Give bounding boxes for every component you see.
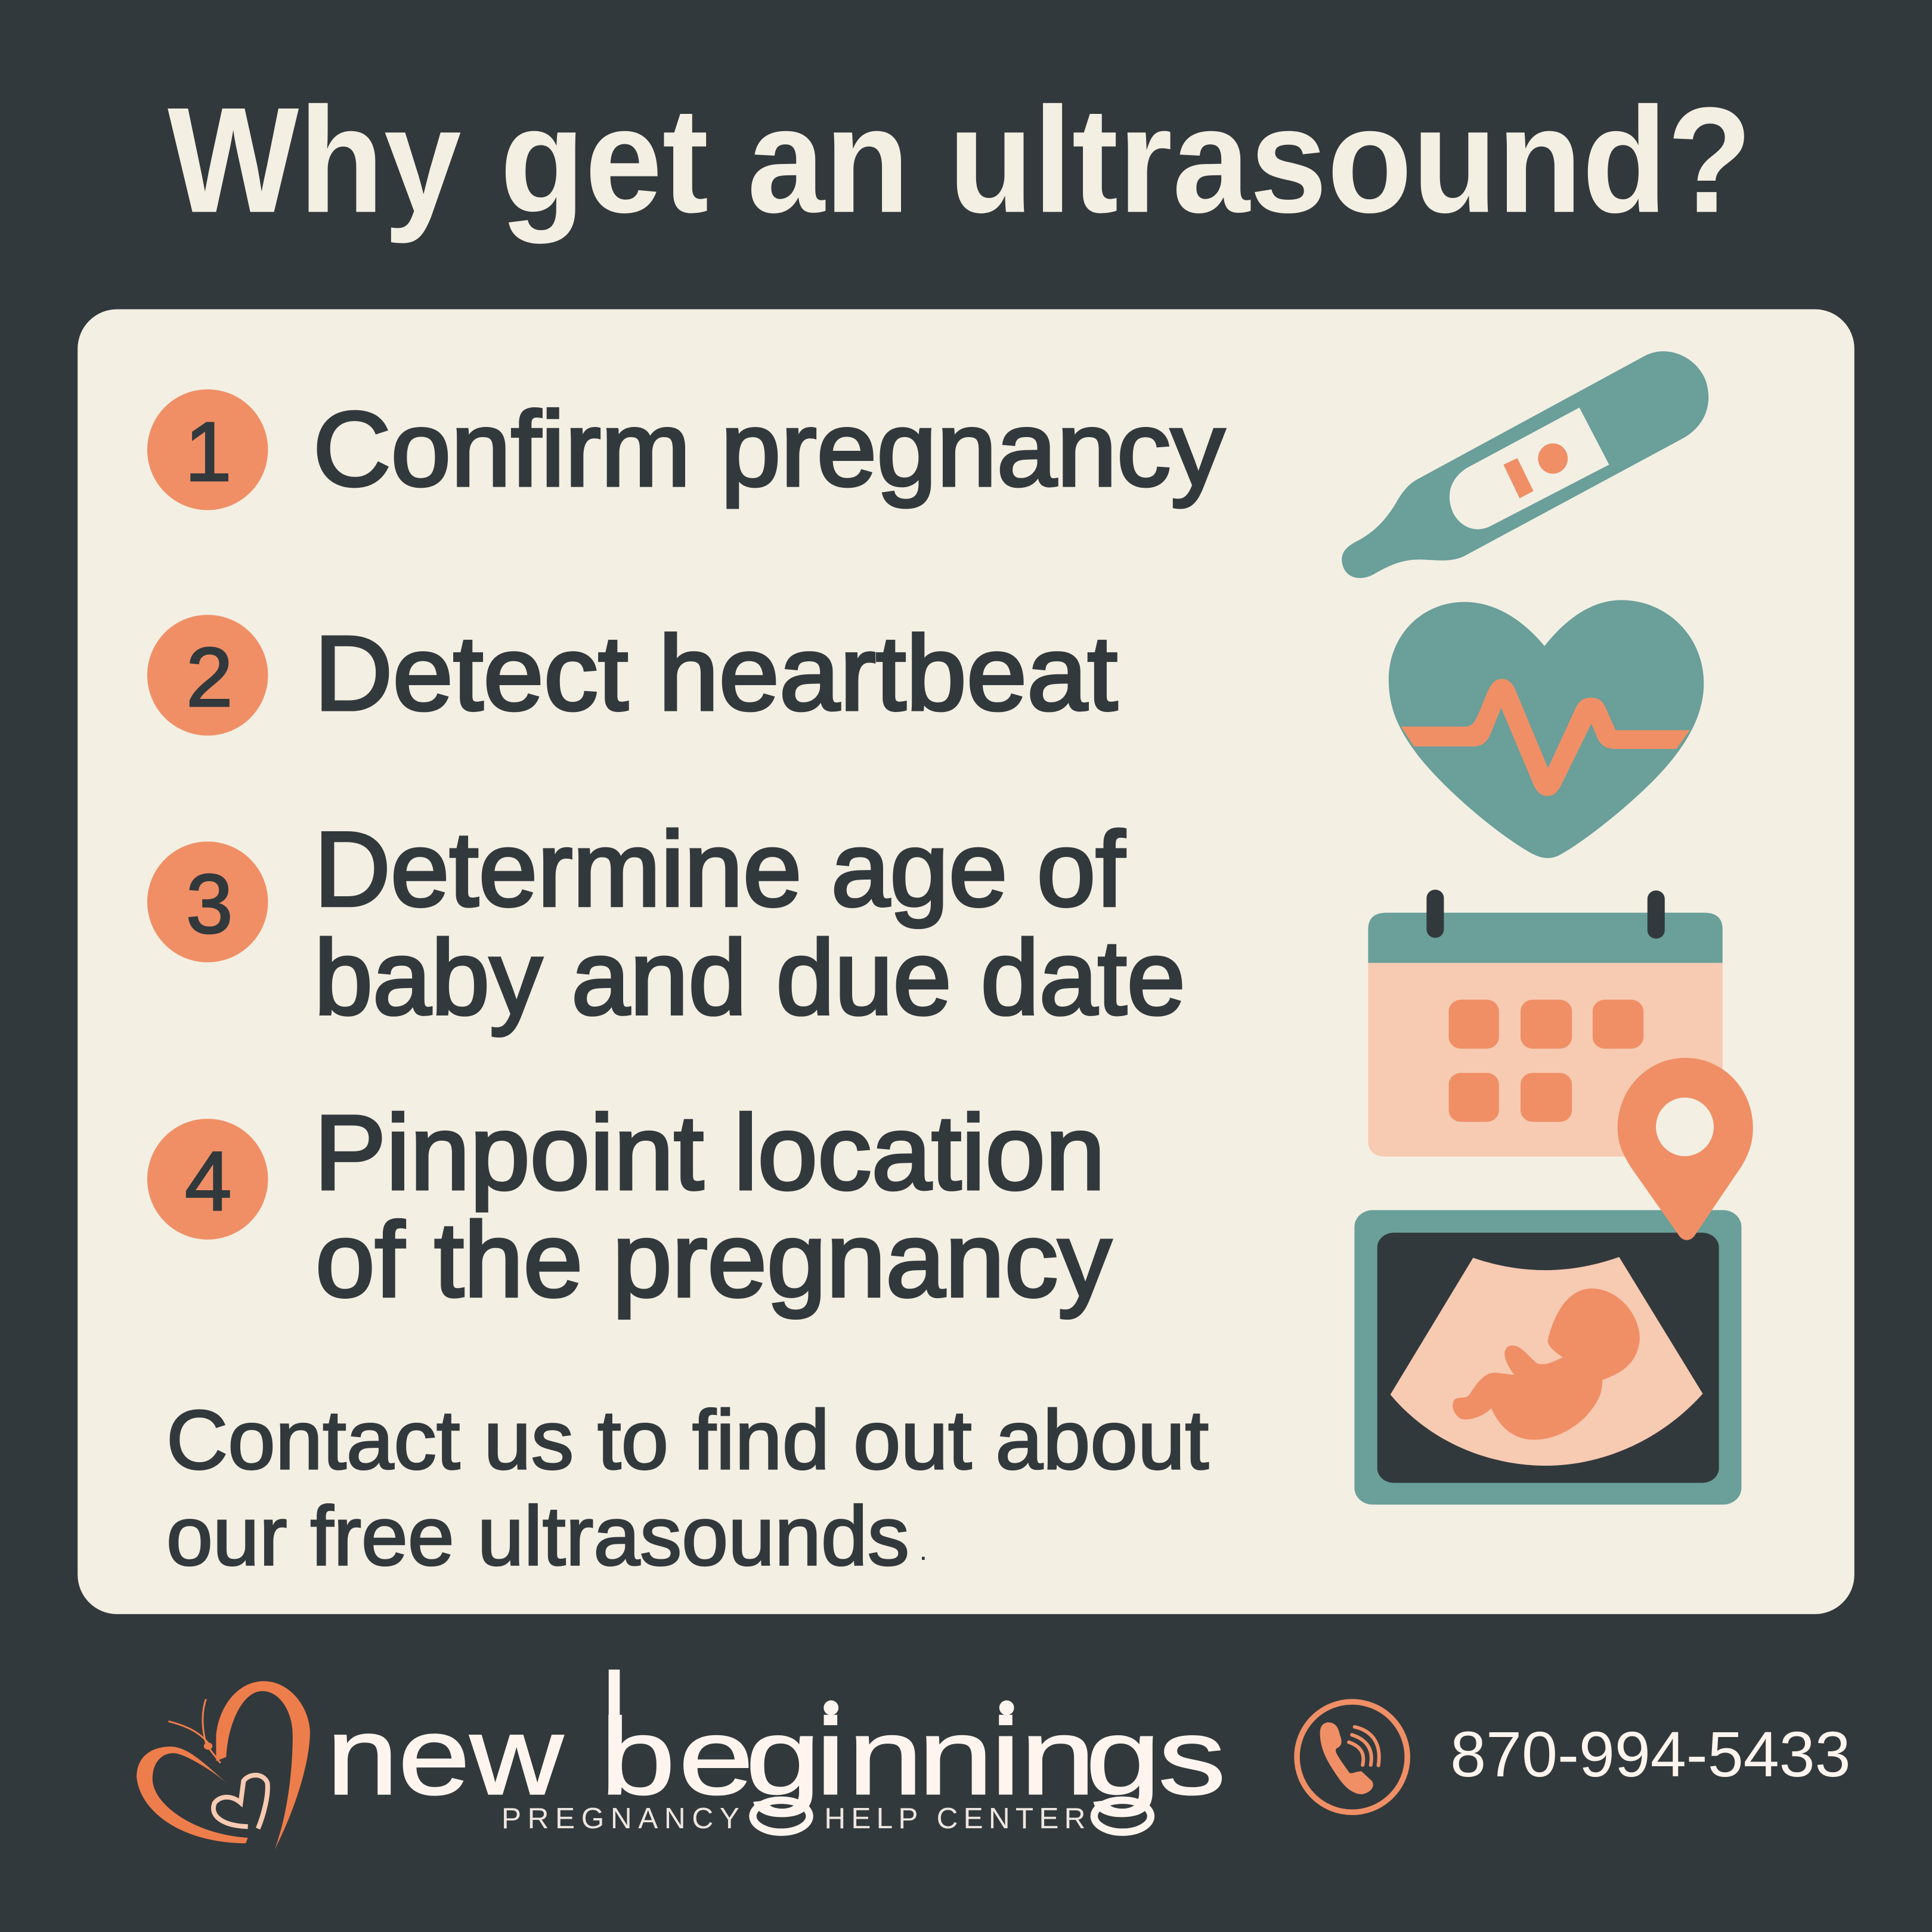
panel: reasons card — [78, 309, 1854, 1614]
icon: location pin — [1618, 1058, 1753, 1240]
item 2: detect heartbeat: 2 — [186, 630, 233, 724]
item 4: pinpoint location: of the pregnancy — [315, 1200, 1111, 1319]
icon: pregnancy test — [1342, 351, 1708, 578]
call to action text: . — [919, 1533, 927, 1566]
item 1: confirm pregnancy: 1 — [185, 405, 231, 499]
item 3: determine age and due date — [147, 810, 1185, 1037]
logo tagline — [501, 1801, 1085, 1835]
call to action text — [166, 1393, 1209, 1583]
logo wordmark: new beginnings — [327, 1670, 1226, 1832]
logo: heart with butterfly — [137, 1681, 310, 1850]
icon: fetus silhouette — [1453, 1289, 1640, 1440]
call to action text: our free ultrasounds — [166, 1489, 909, 1583]
icon: ultrasound monitor — [1354, 1210, 1741, 1504]
title: Why get an ultrasound? — [168, 76, 1752, 244]
item 3: determine age and due date: baby and due date — [314, 918, 1185, 1037]
item 1: confirm pregnancy: Confirm pregnancy — [313, 389, 1225, 508]
item 4: pinpoint location: 4 — [185, 1134, 231, 1228]
item 4: pinpoint location — [147, 1093, 1111, 1319]
item 4: pinpoint location: Pinpoint location — [314, 1093, 1105, 1212]
icon: heart with pulse — [1389, 600, 1704, 858]
logo tagline: HELP CENTER — [824, 1801, 1085, 1835]
icon: calendar — [1368, 890, 1723, 1157]
item 3: determine age and due date: Determine age of — [314, 810, 1125, 928]
item 2: detect heartbeat: Detect heartbeat — [314, 614, 1117, 732]
phone number: 870-994-5433 — [1450, 1719, 1851, 1790]
logo wordmark: new beginnings: new — [327, 1695, 564, 1818]
icon: phone in ring — [1297, 1702, 1407, 1812]
logo tagline: PREGNANCY — [501, 1801, 739, 1835]
call to action text: Contact us to find out about — [166, 1393, 1209, 1487]
logo wordmark: new beginnings: beginnings — [600, 1696, 1226, 1817]
item 3: determine age and due date: 3 — [186, 857, 233, 950]
